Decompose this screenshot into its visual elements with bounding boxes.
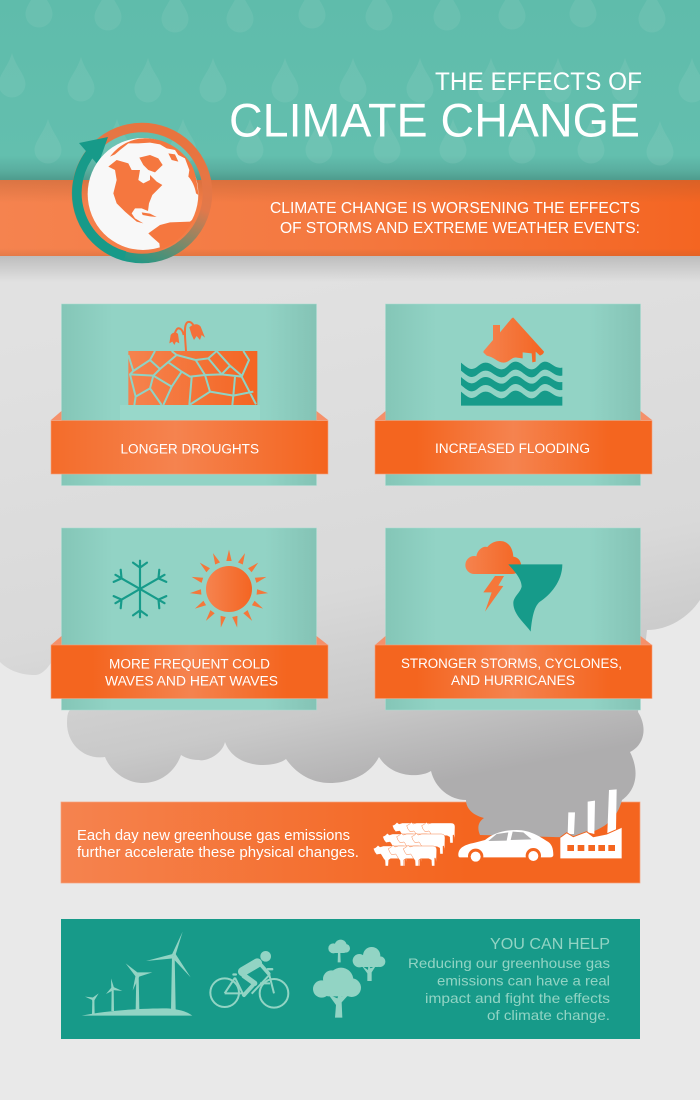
label ribbon bbox=[375, 411, 652, 474]
help text: impact and fight the effects bbox=[425, 990, 610, 1006]
label ribbon bbox=[375, 636, 652, 698]
icon: car bbox=[458, 830, 553, 864]
icon: herd of cows bbox=[373, 822, 455, 866]
help text: emissions can have a real bbox=[437, 972, 610, 988]
icon: wind turbines bbox=[82, 932, 192, 1016]
panel: you can help bbox=[61, 919, 640, 1039]
help text: Reducing our greenhouse gas bbox=[408, 955, 610, 971]
panel: emissions banner bbox=[61, 802, 640, 883]
subtitle: CLIMATE CHANGE IS WORSENING THE EFFECTS bbox=[270, 200, 640, 217]
band shadow overlay bbox=[0, 256, 700, 282]
icon: flooded house bbox=[461, 318, 562, 406]
icon: snowflake bbox=[112, 561, 168, 617]
panel: stronger storms bbox=[375, 528, 652, 710]
help text bbox=[408, 936, 610, 1023]
icon: factory bbox=[560, 789, 622, 858]
help text: YOU CAN HELP bbox=[490, 936, 610, 953]
help text: of climate change. bbox=[487, 1007, 610, 1023]
panel: cold waves and heat waves bbox=[51, 528, 328, 710]
label ribbon: INCREASED FLOODING bbox=[435, 441, 590, 456]
icon: lighter ground strip bbox=[120, 405, 260, 420]
panel: increased flooding bbox=[375, 304, 652, 486]
panel: longer droughts bbox=[51, 304, 328, 486]
label ribbon: LONGER DROUGHTS bbox=[120, 442, 259, 456]
icon: cracked earth bbox=[128, 351, 257, 405]
header: teal rain panel bbox=[0, 0, 700, 181]
icon: globe with circular arrow bbox=[76, 128, 208, 258]
title: CLIMATE CHANGE bbox=[229, 94, 640, 146]
globe bbox=[88, 138, 198, 250]
icon: trees bbox=[313, 940, 385, 1018]
orange subtitle band bbox=[0, 180, 700, 256]
emissions text: Each day new greenhouse gas emissions bbox=[77, 828, 350, 844]
icon: storm cloud, lightning and tornado bbox=[465, 541, 562, 632]
label ribbon: AND HURRICANES bbox=[451, 673, 575, 688]
ring arrow bbox=[76, 128, 208, 258]
title: THE EFFECTS OF bbox=[435, 68, 642, 96]
icon: wilted flower bbox=[169, 322, 205, 351]
emissions text: further accelerate these physical changes. bbox=[77, 845, 359, 861]
label ribbon: STRONGER STORMS, CYCLONES, bbox=[401, 656, 622, 671]
subtitle: OF STORMS AND EXTREME WEATHER EVENTS: bbox=[280, 220, 640, 237]
subtitle bbox=[270, 200, 640, 237]
icon: cyclist bbox=[210, 951, 288, 1008]
label ribbon bbox=[51, 411, 328, 474]
icon: sun bbox=[190, 550, 268, 628]
emissions text bbox=[77, 828, 359, 861]
label ribbon bbox=[51, 636, 328, 698]
smoke cloud bbox=[0, 256, 700, 837]
title bbox=[229, 68, 642, 146]
rain drops pattern bbox=[0, 0, 700, 166]
label ribbon: WAVES AND HEAT WAVES bbox=[105, 674, 278, 688]
label ribbon: MORE FREQUENT COLD bbox=[109, 656, 270, 672]
